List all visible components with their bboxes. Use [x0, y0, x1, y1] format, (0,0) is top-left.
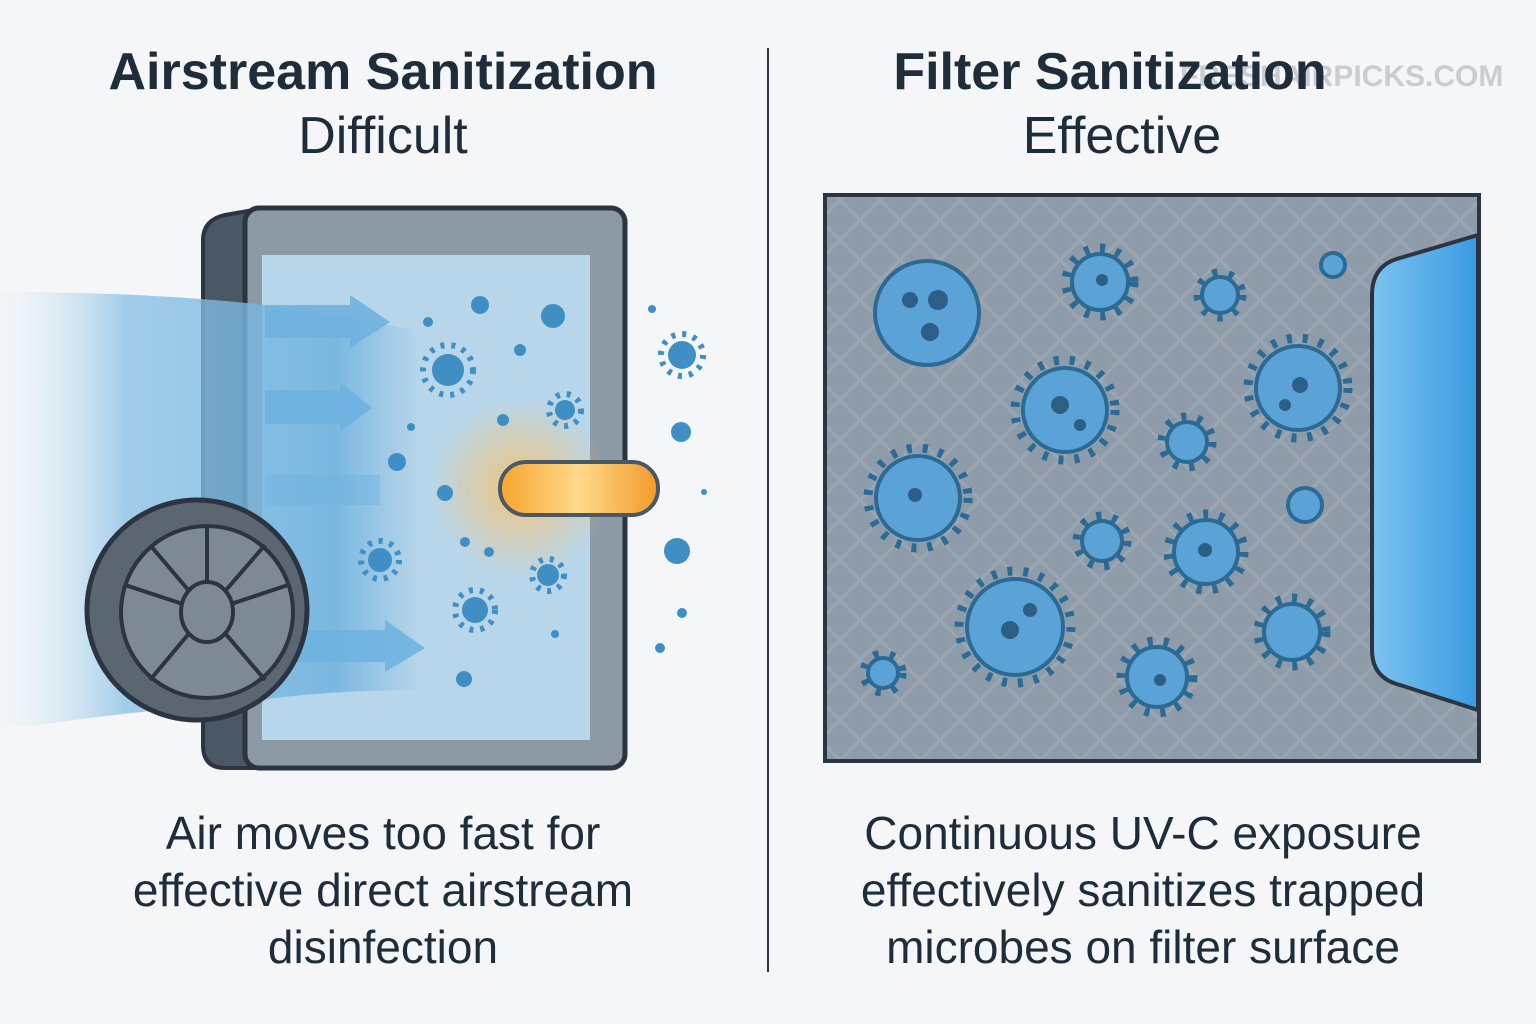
- title: left: Difficult: [298, 107, 468, 165]
- caption: right: microbes on filter surface: [886, 921, 1400, 973]
- box front: [245, 208, 625, 768]
- title: right: [893, 43, 1327, 165]
- illustration: filter: [823, 193, 1481, 763]
- illustration: airstream: [23, 206, 707, 770]
- microbe spikes: [864, 248, 1348, 713]
- title: left: [108, 43, 658, 165]
- caption: left: disinfection: [268, 921, 498, 973]
- microbes: [868, 253, 1345, 707]
- airflow: [0, 292, 420, 726]
- caption: left: effective direct airstream: [133, 864, 633, 916]
- title: left: Airstream Sanitization: [108, 43, 658, 101]
- watermark: FRESHAIRPICKS.COM: [1180, 60, 1503, 93]
- caption: right: effectively sanitizes trapped: [861, 864, 1425, 916]
- title: right: Filter Sanitization: [893, 43, 1327, 101]
- microbes: [368, 296, 707, 687]
- fan: [87, 500, 307, 720]
- box back frame: [203, 208, 265, 768]
- uv lamp: [1372, 235, 1478, 710]
- caption: right: [861, 807, 1425, 973]
- caption: left: Air moves too fast for: [166, 807, 600, 859]
- title: right: Effective: [1023, 107, 1221, 165]
- divider: [767, 48, 769, 972]
- glow + lamp: [430, 398, 610, 578]
- caption: right: Continuous UV-C exposure: [864, 807, 1422, 859]
- caption: left: [133, 807, 633, 973]
